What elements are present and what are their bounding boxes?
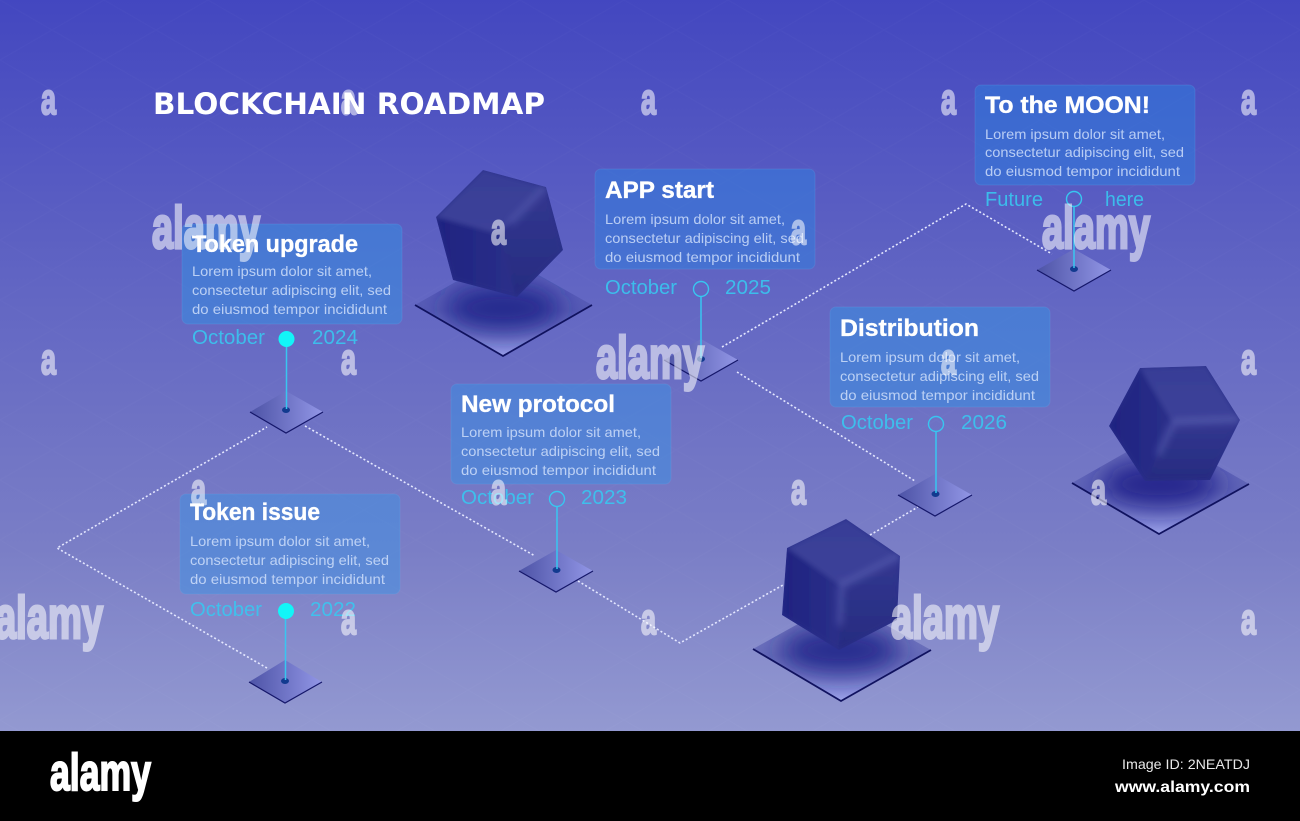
watermarks: alamy xyxy=(891,585,999,651)
milestone: Token upgrade xyxy=(182,224,402,433)
card text: do eiusmod tempor incididunt xyxy=(840,387,1035,403)
card xyxy=(595,169,815,269)
pin xyxy=(928,416,944,493)
milestone: Distribution xyxy=(830,307,1050,516)
watermarks: alamy xyxy=(1042,195,1150,261)
card text: consectetur adipiscing elit, sed xyxy=(461,443,660,459)
card text: New protocol xyxy=(461,391,615,418)
card text xyxy=(190,499,389,587)
date: October xyxy=(461,487,534,509)
title: BLOCKCHAIN ROADMAP xyxy=(153,87,545,121)
milestone: Token issue xyxy=(180,494,400,703)
card text: consectetur adipiscing elit, sed xyxy=(605,230,804,246)
watermarks: a xyxy=(1241,75,1256,124)
watermarks: a xyxy=(641,595,656,644)
platform xyxy=(1037,249,1111,291)
cube on platform: top left xyxy=(415,170,592,356)
image id: Image ID: 2NEATDJ xyxy=(1122,756,1250,772)
card text: consectetur adipiscing elit, sed xyxy=(985,144,1184,160)
card text: Lorem ipsum dolor sit amet, xyxy=(840,349,1020,365)
watermarks: a xyxy=(341,335,356,384)
date: October xyxy=(605,277,677,299)
watermarks: a xyxy=(791,205,806,254)
card text xyxy=(461,391,660,478)
date xyxy=(605,277,771,299)
card text: Distribution xyxy=(840,315,979,342)
card text: To the MOON! xyxy=(985,92,1150,119)
pin xyxy=(550,492,564,569)
date: October xyxy=(841,412,913,434)
card text: do eiusmod tempor incididunt xyxy=(461,462,656,478)
platform xyxy=(250,391,323,433)
card xyxy=(182,224,402,324)
card text: do eiusmod tempor incididunt xyxy=(985,163,1180,179)
card text: Lorem ipsum dolor sit amet, xyxy=(605,211,785,227)
watermarks: a xyxy=(641,75,656,124)
pin xyxy=(278,603,294,680)
footer logo: alamy xyxy=(50,744,151,802)
date xyxy=(985,189,1144,211)
card text xyxy=(605,177,804,265)
date xyxy=(190,599,356,621)
card xyxy=(830,307,1050,407)
pin xyxy=(1066,192,1082,268)
watermarks xyxy=(0,75,1256,651)
date: 2022 xyxy=(310,599,356,621)
card text: do eiusmod tempor incididunt xyxy=(190,571,385,587)
date xyxy=(192,327,358,349)
date xyxy=(841,412,1007,434)
pin xyxy=(278,331,294,409)
date: October xyxy=(192,327,265,349)
card text: consectetur adipiscing elit, sed xyxy=(840,368,1039,384)
dotted roadmap path xyxy=(57,204,1052,668)
card text: Lorem ipsum dolor sit amet, xyxy=(190,533,370,549)
date: 2026 xyxy=(961,412,1007,434)
card text: Lorem ipsum dolor sit amet, xyxy=(985,126,1165,142)
milestone: New protocol xyxy=(451,384,671,592)
date: 2023 xyxy=(581,487,627,509)
card text: Lorem ipsum dolor sit amet, xyxy=(461,424,641,440)
watermarks: a xyxy=(941,335,956,384)
watermarks: a xyxy=(1241,335,1256,384)
date: 2025 xyxy=(725,277,771,299)
card xyxy=(451,384,671,484)
watermarks: a xyxy=(41,75,56,124)
date: Future xyxy=(985,189,1043,211)
watermarks: a xyxy=(491,465,506,514)
platform xyxy=(519,550,593,592)
footer bar xyxy=(0,731,1300,821)
date xyxy=(461,487,627,509)
card xyxy=(180,494,400,594)
watermarks: a xyxy=(491,205,506,254)
card text: APP start xyxy=(605,177,714,204)
platform xyxy=(898,474,972,516)
card text: do eiusmod tempor incididunt xyxy=(192,301,387,317)
date: October xyxy=(190,599,262,621)
card text: Token upgrade xyxy=(192,231,358,258)
watermarks: alamy xyxy=(596,325,704,391)
watermarks: a xyxy=(1241,595,1256,644)
watermarks: a xyxy=(41,335,56,384)
watermarks: a xyxy=(1091,465,1106,514)
card text xyxy=(192,231,391,317)
milestone: To the MOON xyxy=(975,85,1195,291)
watermarks: a xyxy=(791,465,806,514)
watermarks: a xyxy=(341,75,356,124)
card text xyxy=(985,92,1184,179)
watermarks: a xyxy=(191,465,206,514)
date: here xyxy=(1105,189,1144,211)
pin xyxy=(694,282,708,358)
card text: Token issue xyxy=(190,499,320,526)
cube on platform: right xyxy=(1072,366,1249,534)
platform xyxy=(664,339,738,381)
card text: do eiusmod tempor incididunt xyxy=(605,249,800,265)
card text: consectetur adipiscing elit, sed xyxy=(192,282,391,298)
card xyxy=(975,85,1195,185)
watermarks: alamy xyxy=(152,195,260,261)
platform xyxy=(249,660,322,703)
cube on platform: bottom xyxy=(753,519,931,701)
watermarks: a xyxy=(941,75,956,124)
watermarks: alamy xyxy=(0,585,103,651)
card text: Lorem ipsum dolor sit amet, xyxy=(192,263,372,279)
milestone: APP start xyxy=(595,169,815,381)
card text: consectetur adipiscing elit, sed xyxy=(190,552,389,568)
card text xyxy=(840,315,1039,403)
date: 2024 xyxy=(312,327,358,349)
watermarks: a xyxy=(341,595,356,644)
website: www.alamy.com xyxy=(1114,779,1250,796)
